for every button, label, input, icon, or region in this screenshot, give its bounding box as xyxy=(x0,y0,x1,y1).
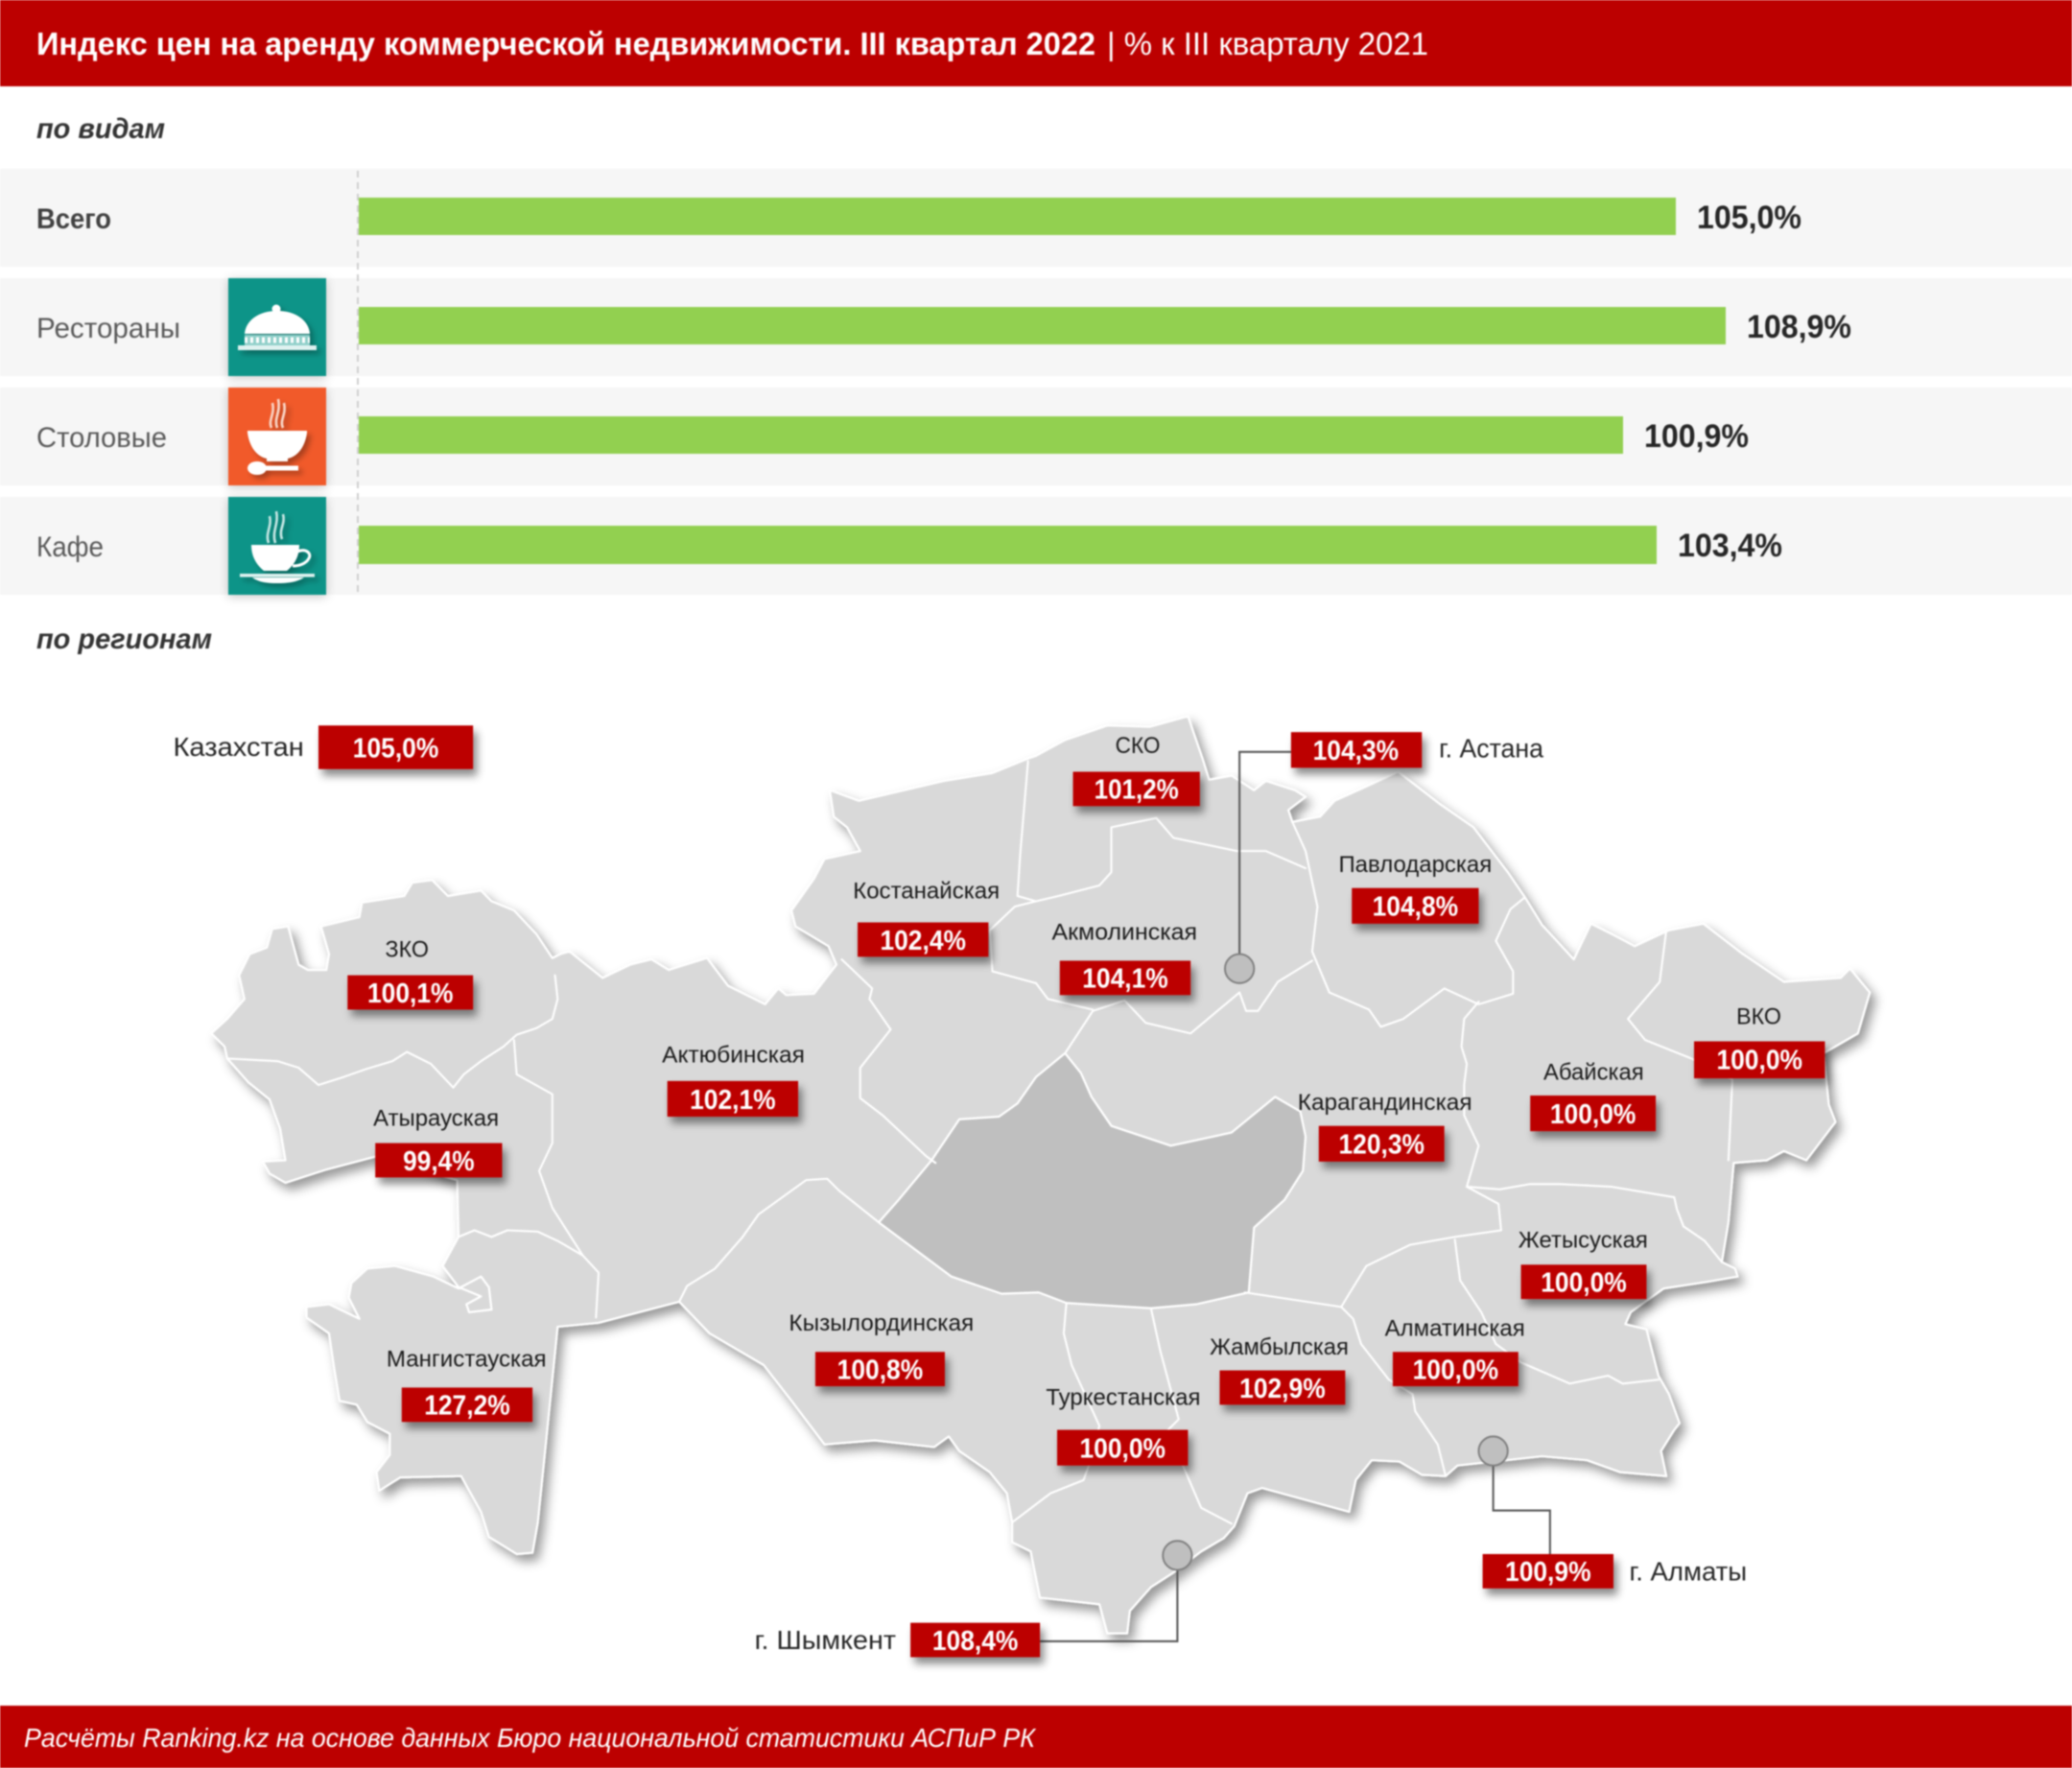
callout: Костанайская: Костанайская xyxy=(853,879,1000,905)
bar: Кафе: Кафе xyxy=(36,531,104,563)
callout: Жамбылская: 102,9% xyxy=(1239,1374,1326,1404)
callout: Павлодарская: Павлодарская xyxy=(1338,852,1492,878)
callout: СКО: СКО xyxy=(1116,733,1160,759)
bar: Столовые: Столовые xyxy=(36,422,167,454)
title bar: | % к III кварталу 2021 xyxy=(1107,26,1428,61)
callout: Жетысуская: 100,0% xyxy=(1541,1268,1627,1299)
callout: Актюбинская: Актюбинская xyxy=(662,1043,805,1069)
callout: Мангистауская: 127,2% xyxy=(424,1391,510,1422)
callout: Павлодарская: 104,8% xyxy=(1373,892,1458,923)
callout: ЗКО xyxy=(347,936,473,1009)
bar: Рестораны xyxy=(36,307,1851,345)
callout: ВКО xyxy=(1694,1004,1825,1078)
callout: Актюбинская xyxy=(662,1043,805,1117)
callout: ВКО: ВКО xyxy=(1736,1004,1781,1030)
callout: Казахстан: Казахстан xyxy=(173,732,304,762)
callout: Кызылординская: 100,8% xyxy=(837,1355,923,1385)
callout: Жетысуская: Жетысуская xyxy=(1519,1227,1648,1253)
callout: Жамбылская: Жамбылская xyxy=(1210,1334,1349,1360)
footer: source xyxy=(0,1706,2072,1768)
callout: Казахстан: 105,0% xyxy=(353,733,438,764)
callout: Акмолинская: Акмолинская xyxy=(1052,919,1197,945)
icon: restaurant cloche xyxy=(228,278,326,376)
callout: Алматинская: Алматинская xyxy=(1385,1316,1525,1342)
callout: Атырауская: Атырауская xyxy=(373,1106,499,1132)
callout: Туркестанская: 100,0% xyxy=(1079,1433,1166,1464)
panel: map of Kazakhstan xyxy=(173,717,1870,1657)
callout: г. Алматы with connector: г. Алматы xyxy=(1630,1557,1747,1587)
callout: Кызылординская xyxy=(789,1310,974,1386)
callout: Павлодарская xyxy=(1338,852,1492,924)
callout: Атырауская xyxy=(373,1106,502,1177)
callout: Акмолинская xyxy=(1052,919,1197,995)
bar: Столовые xyxy=(36,416,1749,455)
callout: Карагандинская: 120,3% xyxy=(1338,1130,1424,1161)
bar: Рестораны: Рестораны xyxy=(36,313,180,344)
callout: Алматинская xyxy=(1385,1316,1525,1386)
bar: Всего: 105,0% xyxy=(1697,200,1801,236)
icon: cafe coffee cup xyxy=(228,497,326,595)
footer: source: Расчёты Ranking.kz на основе данных Бюро национальной статистики АСПиР РК xyxy=(24,1723,1036,1753)
callout: Мангистауская xyxy=(387,1346,547,1422)
map: internal region borders xyxy=(227,761,1732,1523)
heading: по регионам: по регионам xyxy=(36,624,212,655)
callout: Жамбылская xyxy=(1210,1334,1349,1404)
callout: г. Шымкент with connector: 108,4% xyxy=(932,1626,1018,1657)
bar: Рестораны: 108,9% xyxy=(1747,309,1851,345)
bar: Кафе xyxy=(36,526,1782,564)
callout: Карагандинская: Карагандинская xyxy=(1298,1090,1472,1116)
callout: Туркестанская: Туркестанская xyxy=(1046,1384,1201,1410)
title bar: Индекс цен на аренду коммерческой недвижимости. III квартал 2022 xyxy=(36,26,1095,61)
callout: Костанайская: 102,4% xyxy=(880,926,966,956)
title bar xyxy=(0,0,2072,86)
callout: Абайская xyxy=(1530,1059,1656,1131)
bar: Всего xyxy=(36,198,1801,236)
callout: г. Шымкент with connector xyxy=(755,1541,1192,1657)
map: Ulytau region xyxy=(879,1053,1306,1308)
icon: canteen soup bowl xyxy=(228,388,326,485)
heading: по видам: по видам xyxy=(36,113,165,145)
callout: ЗКО: 100,1% xyxy=(367,978,453,1009)
callout: Карагандинская xyxy=(1298,1090,1472,1162)
bar: Столовые: 100,9% xyxy=(1644,418,1749,455)
callout: СКО xyxy=(1073,733,1200,806)
bar: Всего: Всего xyxy=(36,203,111,235)
callout: г. Астана with connector xyxy=(1225,732,1544,983)
callout: Алматинская: 100,0% xyxy=(1413,1355,1498,1385)
callout: Актюбинская: 102,1% xyxy=(690,1085,776,1116)
callout: Абайская: Абайская xyxy=(1543,1059,1644,1085)
callout: г. Астана with connector: г. Астана xyxy=(1439,733,1544,763)
callout: СКО: 101,2% xyxy=(1095,775,1179,806)
callout: ЗКО: ЗКО xyxy=(386,936,429,962)
callout: ВКО: 100,0% xyxy=(1716,1045,1802,1075)
map: country silhouette xyxy=(211,717,1870,1634)
callout: Туркестанская xyxy=(1046,1384,1201,1466)
bar: Кафе: 103,4% xyxy=(1678,528,1782,564)
callout: Акмолинская: 104,1% xyxy=(1082,964,1168,995)
callout: Казахстан xyxy=(173,725,473,769)
callout: Мангистауская: Мангистауская xyxy=(387,1346,547,1372)
callout: Жетысуская xyxy=(1519,1227,1648,1299)
callout: Костанайская xyxy=(853,879,1000,956)
callout: Атырауская: 99,4% xyxy=(403,1146,475,1177)
panel: bar chart by type xyxy=(0,169,2072,595)
callout: г. Алматы with connector xyxy=(1478,1436,1747,1589)
callout: г. Алматы with connector: 100,9% xyxy=(1505,1557,1591,1588)
callout: Абайская: 100,0% xyxy=(1550,1099,1636,1130)
callout: г. Астана with connector: 104,3% xyxy=(1313,736,1399,766)
callout: Кызылординская: Кызылординская xyxy=(789,1310,974,1336)
callout: г. Шымкент with connector: г. Шымкент xyxy=(755,1625,896,1655)
